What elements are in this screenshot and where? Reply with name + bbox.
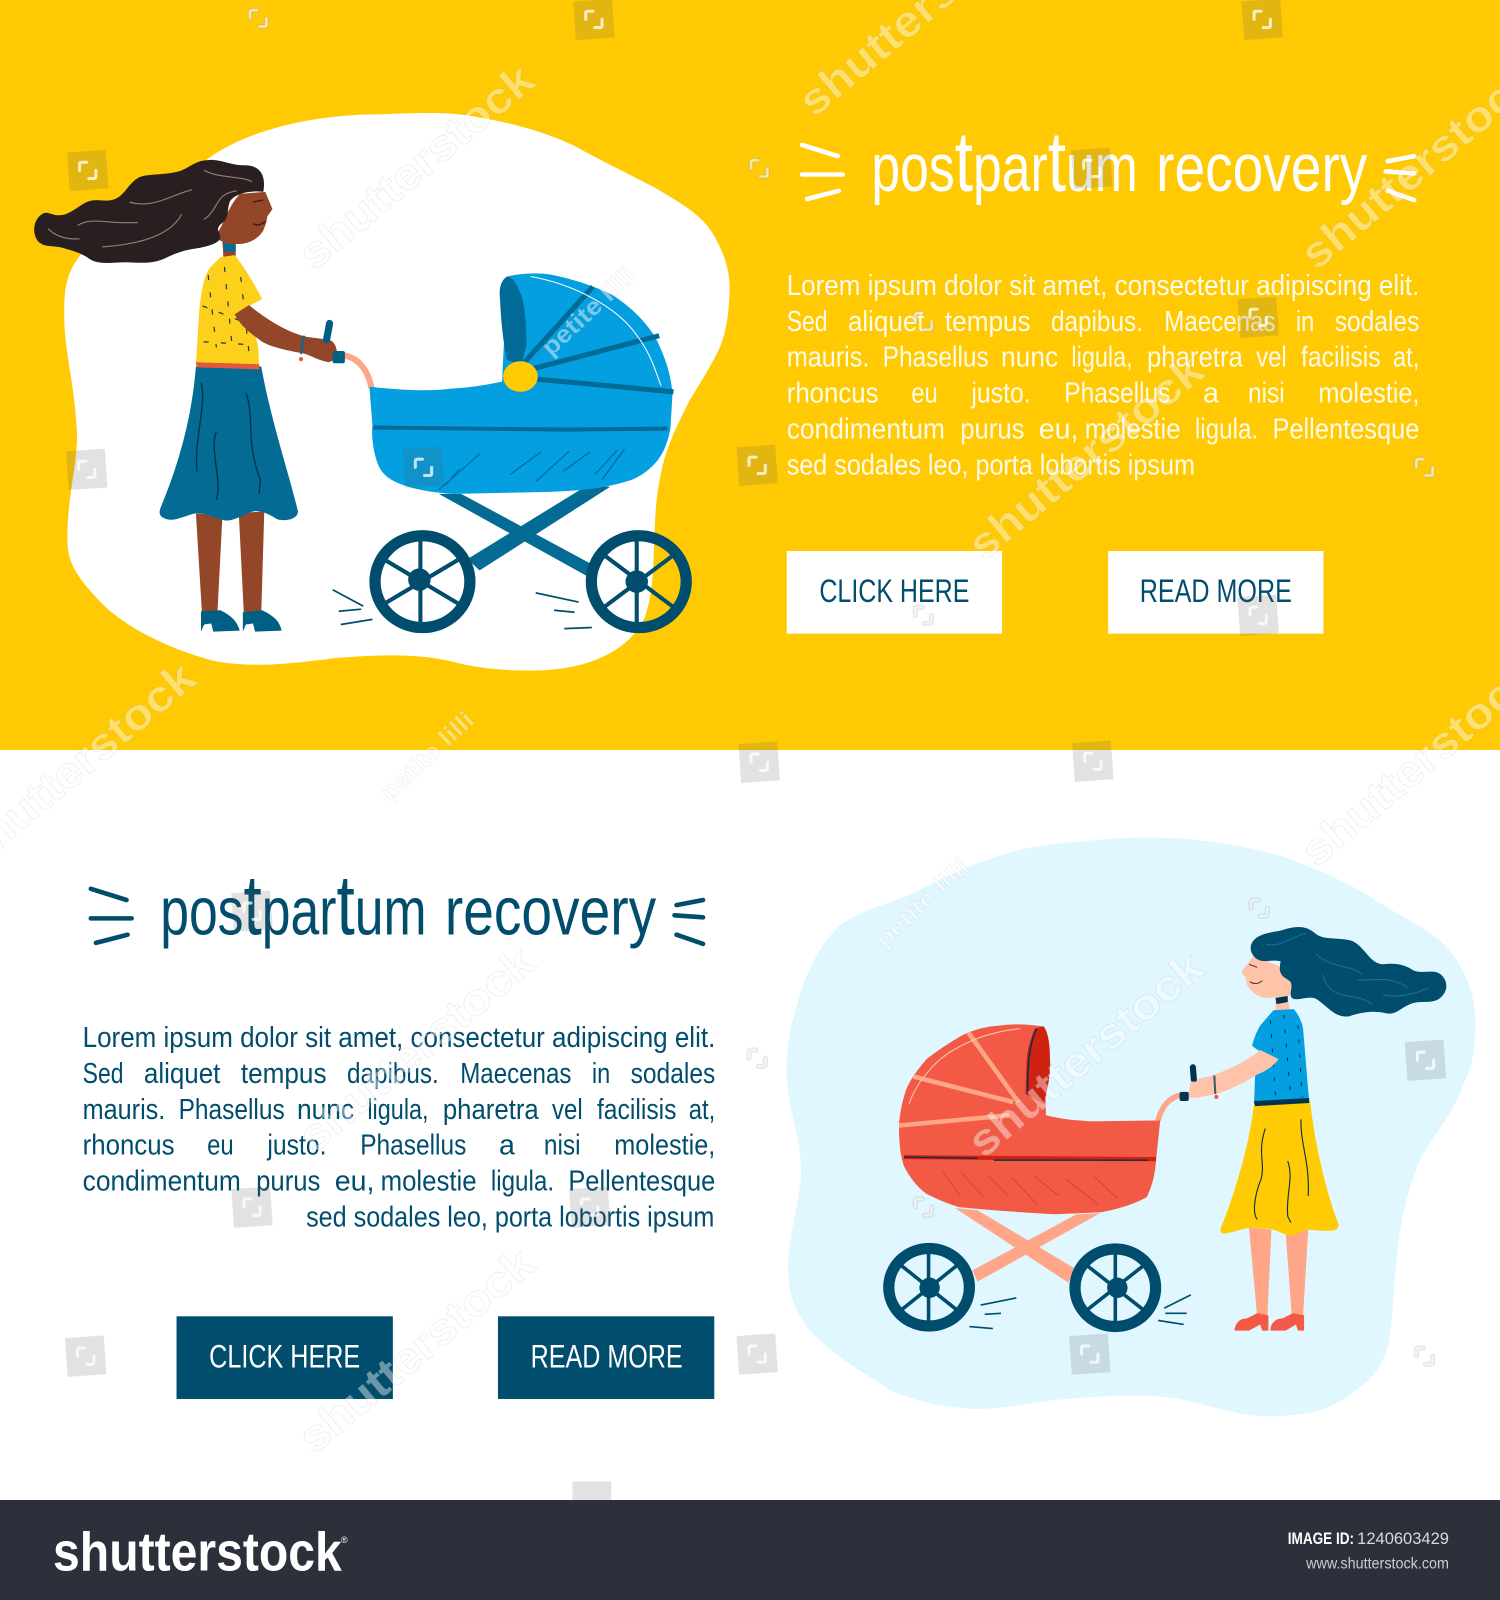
text block: top paragraph: Phasellus — [883, 342, 989, 374]
text block: bottom paragraph: eu, — [335, 1166, 374, 1198]
website: www.shutterstock.com — [1305, 1555, 1449, 1572]
text block: top paragraph: Phasellus — [1064, 378, 1170, 410]
text block: bottom paragraph: Phasellus — [179, 1094, 285, 1126]
title: bottom heading: postpartum — [160, 858, 427, 954]
text block: top paragraph: eu — [911, 378, 938, 410]
button: click here (bottom) — [177, 1316, 393, 1399]
text block: top paragraph: purus — [960, 414, 1024, 446]
text block: bottom paragraph: Sed — [83, 1058, 123, 1090]
text block: top paragraph: sodales — [1335, 306, 1419, 338]
watermark overlay: petite lilli — [870, 854, 975, 953]
text block: top paragraph: pharetra — [1147, 342, 1243, 374]
text block: top paragraph: aliquet — [848, 306, 925, 338]
text block: top paragraph: facilisis — [1301, 342, 1381, 374]
title: bottom heading — [91, 858, 703, 954]
watermark overlay: shutterstock — [289, 1238, 544, 1463]
text block: top paragraph: Lorem ipsum dolor sit amet, consectetur adipiscing elit. — [787, 270, 1419, 302]
panel: yellow banner — [0, 0, 1500, 750]
illustration: woman with long blue hair — [1189, 927, 1446, 1331]
white blob background — [64, 113, 730, 671]
text block: top paragraph: justo. — [971, 378, 1031, 410]
text block: bottom paragraph: sodales — [631, 1058, 715, 1090]
title: top heading — [802, 114, 1414, 210]
text block: bottom paragraph: eu — [207, 1130, 234, 1162]
registered mark: ® — [341, 1535, 348, 1545]
text block: top paragraph: a — [1203, 378, 1219, 410]
text block: bottom paragraph: sed sodales leo, porta lobortis ipsum — [306, 1202, 714, 1234]
text block: top paragraph — [787, 270, 1419, 481]
text block: top paragraph: eu, — [1039, 414, 1078, 446]
image id: IMAGE ID: — [1288, 1530, 1354, 1548]
text block: top paragraph: mauris. — [787, 342, 869, 374]
text block: top paragraph: in — [1296, 306, 1314, 338]
text block: bottom paragraph: ligula, — [367, 1094, 429, 1126]
button: read more (top): READ MORE — [1140, 572, 1292, 609]
text block: bottom paragraph: Maecenas — [460, 1058, 571, 1090]
text block: bottom paragraph: molestie — [381, 1166, 477, 1198]
text block: bottom paragraph: nunc — [297, 1094, 354, 1126]
text block: top paragraph: molestie, — [1318, 378, 1419, 410]
text block: top paragraph: sed sodales leo, porta lobortis ipsum — [787, 449, 1195, 481]
text block: top paragraph: Pellentesque — [1272, 414, 1419, 446]
wheel left — [889, 1248, 969, 1326]
text block: bottom paragraph: purus — [256, 1166, 320, 1198]
button: read more (bottom) — [498, 1316, 714, 1399]
text block: top paragraph: nunc — [1001, 342, 1058, 374]
text block: top paragraph: tempus — [945, 306, 1031, 338]
panel: white banner — [0, 750, 1500, 1500]
watermark overlay: petite lilli — [375, 707, 480, 806]
text block: top paragraph: at, — [1393, 342, 1419, 374]
title: bottom heading: recovery — [445, 875, 656, 950]
text block: bottom paragraph: at, — [689, 1094, 715, 1126]
text block: bottom paragraph: molestie, — [614, 1130, 715, 1162]
text block: top paragraph: ligula. — [1195, 414, 1258, 446]
text block: bottom paragraph: in — [592, 1058, 610, 1090]
text block: bottom paragraph: Lorem ipsum dolor sit amet, consectetur adipiscing elit. — [83, 1022, 715, 1054]
text block: bottom paragraph: ligula. — [491, 1166, 554, 1198]
watermark overlay: shutterstock — [289, 937, 544, 1162]
text block: bottom paragraph — [83, 1022, 715, 1234]
watermark overlay: petite lilli — [537, 262, 641, 362]
text block: bottom paragraph: a — [499, 1130, 515, 1162]
text block: bottom paragraph: nisi — [544, 1130, 581, 1162]
footer bar — [0, 1500, 1500, 1600]
text block: bottom paragraph: facilisis — [597, 1094, 677, 1126]
text block: bottom paragraph: Phasellus — [360, 1130, 466, 1162]
text block: top paragraph: Maecenas — [1164, 306, 1276, 338]
text block: top paragraph: Sed — [787, 306, 828, 338]
text block: bottom paragraph: justo. — [266, 1130, 327, 1162]
watermark overlay: shutterstock — [289, 54, 544, 279]
text block: top paragraph: rhoncus — [787, 378, 879, 410]
text block: top paragraph: ligula, — [1071, 342, 1133, 374]
text block: top paragraph: condimentum — [787, 414, 945, 446]
text block: bottom paragraph: dapibus. — [347, 1058, 439, 1090]
wheel right — [591, 536, 686, 628]
button: click here (bottom): CLICK HERE — [209, 1337, 360, 1374]
text block: bottom paragraph: aliquet — [144, 1058, 220, 1090]
image id: 1240603429 — [1357, 1530, 1449, 1548]
text block: top paragraph: nisi — [1248, 378, 1285, 410]
text block: top paragraph: vel — [1256, 342, 1287, 374]
button: click here (top) — [787, 551, 1002, 634]
text block: top paragraph: molestie — [1085, 414, 1181, 446]
title: top heading: postpartum — [871, 114, 1138, 210]
wheel left — [375, 536, 470, 628]
illustration: woman with long dark hair — [34, 160, 337, 632]
watermark overlay: shutterstock — [959, 345, 1213, 570]
text block: bottom paragraph: condimentum — [83, 1166, 241, 1198]
text block: bottom paragraph: rhoncus — [83, 1130, 174, 1162]
text block: bottom paragraph: mauris. — [83, 1094, 165, 1126]
wheel right — [1075, 1249, 1156, 1327]
title: top heading: recovery — [1156, 131, 1368, 206]
text block: bottom paragraph: tempus — [241, 1058, 327, 1090]
text block: bottom paragraph: vel — [552, 1094, 583, 1126]
button: read more (top) — [1108, 551, 1323, 634]
button: read more (bottom): READ MORE — [531, 1337, 683, 1374]
illustration: red stroller — [889, 1024, 1200, 1329]
light blue blob background — [787, 837, 1476, 1416]
text block: top paragraph: dapibus. — [1051, 306, 1143, 338]
watermark overlay: shutterstock — [959, 942, 1213, 1167]
text block: bottom paragraph: Pellentesque — [568, 1166, 715, 1198]
footer logo: shutterstock — [53, 1520, 342, 1582]
button: click here (top): CLICK HERE — [819, 572, 969, 609]
text block: bottom paragraph: pharetra — [443, 1094, 539, 1126]
illustration: blue stroller — [327, 273, 686, 629]
